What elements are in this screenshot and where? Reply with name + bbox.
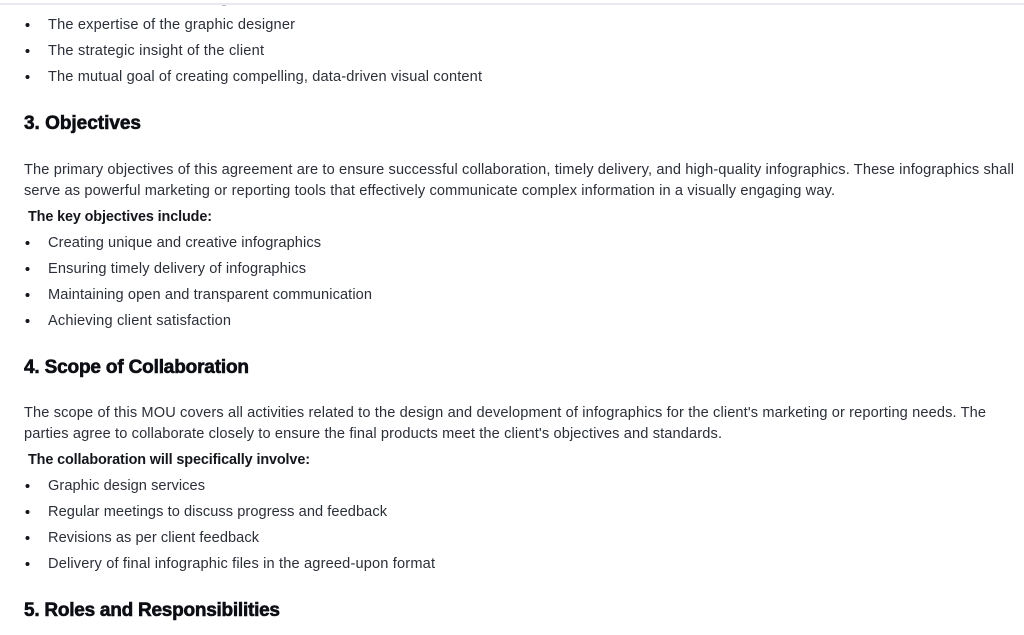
heading: 4. Scope of Collaboration: 4. Scope of Collaboration [24, 357, 249, 378]
bullet list: collaboration items: Graphic design services [48, 478, 205, 494]
bullet list: section 2 continuation: The mutual goal of creating compelling, data-driven visual content [48, 69, 482, 85]
heading: 5. Roles and Responsibilities: 5. Roles and Responsibilities [24, 600, 280, 621]
bullet list: key objectives [26, 235, 372, 329]
text block: objectives paragraph: The primary objectives of this agreement are to ensure successful collaboration, timely delivery, and high-quality infographics. These infographics shall [24, 162, 1014, 178]
bullet list: section 2 continuation: The strategic insight of the client [48, 43, 264, 59]
subheading: key objectives: The key objectives include: [28, 209, 212, 225]
bullet list: key objectives: Achieving client satisfaction [48, 313, 231, 329]
bullet list: collaboration items: Revisions as per client feedback [48, 530, 260, 546]
bullet list: collaboration items: Delivery of final infographic files in the agreed-upon format [48, 556, 435, 572]
text block: scope paragraph [24, 405, 986, 442]
bullet list: key objectives: Ensuring timely delivery of infographics [48, 261, 306, 277]
bullet list: section 2 continuation [26, 17, 482, 85]
text block: objectives paragraph: serve as powerful marketing or reporting tools that effectively communicate complex information in a visually engaging way. [24, 183, 835, 199]
bullet list: section 2 continuation: The expertise of the graphic designer [48, 17, 295, 33]
text block: objectives paragraph [24, 162, 1014, 199]
bullet list: collaboration items [26, 478, 435, 572]
heading: 3. Objectives: 3. Objectives [24, 113, 141, 134]
text block: scope paragraph: parties agree to collaborate closely to ensure the final products meet the client's objectives and standards. [24, 426, 722, 442]
bullet list: collaboration items: Regular meetings to discuss progress and feedback [48, 504, 388, 520]
text block: scope paragraph: The scope of this MOU covers all activities related to the design and development of infographics for the client's marketing or reporting needs. The [24, 405, 986, 421]
subheading: collaboration involvement: The collaboration will specifically involve: [28, 452, 310, 468]
bullet list: key objectives: Maintaining open and transparent communication [48, 287, 372, 303]
bullet list: key objectives: Creating unique and creative infographics [48, 235, 321, 251]
